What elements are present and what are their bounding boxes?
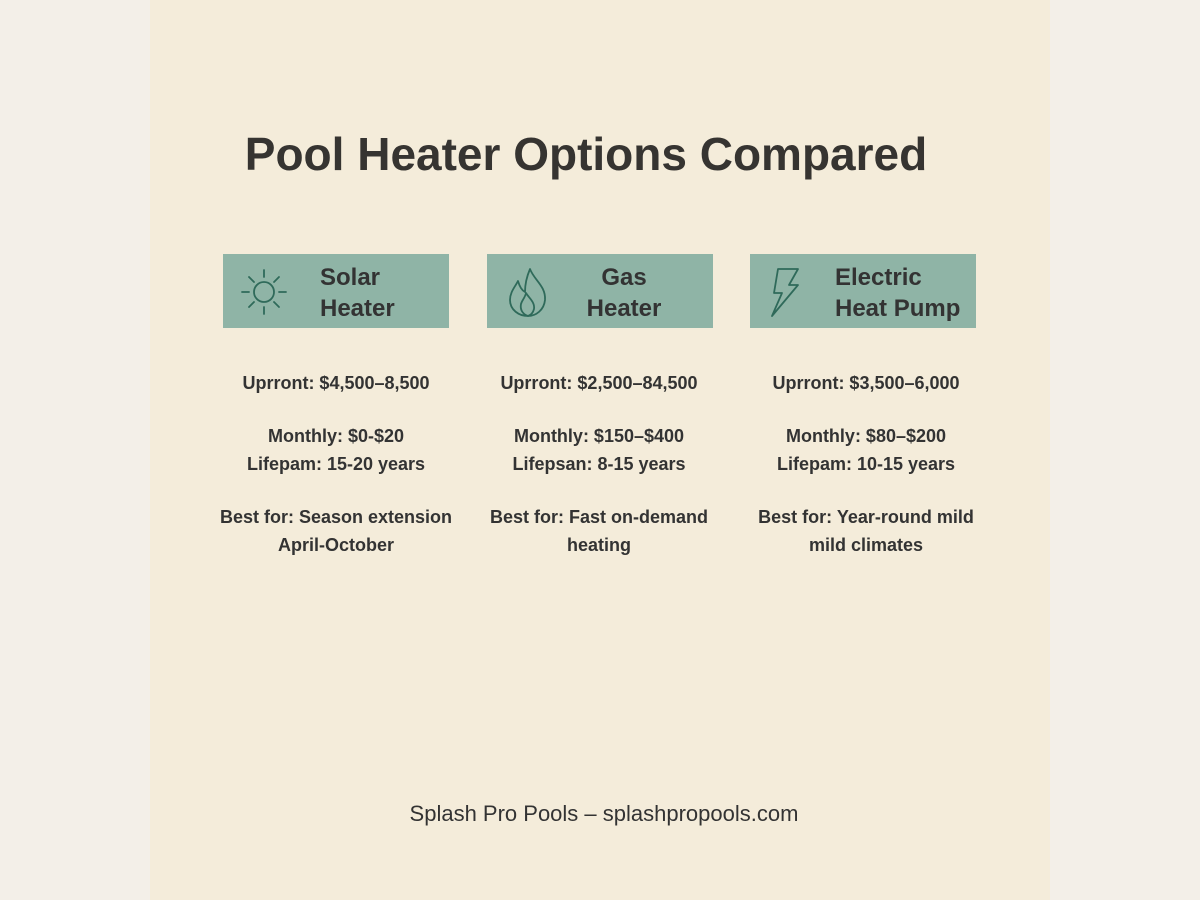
icon: flame bbox=[509, 268, 546, 317]
column: electric details: Lifepam: 10-15 years bbox=[777, 454, 955, 474]
column: solar details: Monthly: $0-$20 bbox=[268, 426, 404, 446]
header: gas heater: Gas bbox=[601, 264, 647, 291]
column: electric details: Monthly: $80–$200 bbox=[786, 426, 946, 446]
column: solar details: Lifepam: 15-20 years bbox=[247, 454, 425, 474]
column: gas details: Monthly: $150–$400 bbox=[514, 426, 684, 446]
column: gas details: Lifepsan: 8-15 years bbox=[512, 454, 686, 474]
column: solar details: April-October bbox=[278, 535, 394, 555]
header: solar heater bbox=[223, 254, 449, 328]
header: electric heat pump: Heat Pump bbox=[835, 295, 960, 322]
header: electric heat pump bbox=[750, 254, 976, 328]
background panel bbox=[150, 0, 1050, 900]
column: electric details bbox=[758, 373, 974, 555]
icon: sun bbox=[241, 269, 287, 315]
icon: lightning bbox=[771, 268, 799, 317]
title: Pool Heater Options Compared bbox=[245, 128, 927, 180]
column: gas details bbox=[490, 373, 708, 555]
column: gas details: Best for: Fast on-demand bbox=[490, 507, 708, 527]
header: electric heat pump: Electric bbox=[835, 264, 922, 291]
column: electric details: Best for: Year-round mild bbox=[758, 507, 974, 527]
column: solar details: Best for: Season extension bbox=[220, 507, 452, 527]
header: gas heater bbox=[487, 254, 713, 328]
column: gas details: Uprront: $2,500–84,500 bbox=[500, 373, 698, 393]
header: solar heater: Heater bbox=[320, 295, 395, 322]
column: electric details: Uprront: $3,500–6,000 bbox=[772, 373, 960, 393]
column: gas details: heating bbox=[567, 535, 631, 555]
header: gas heater: Heater bbox=[587, 295, 661, 322]
column: electric details: mild climates bbox=[809, 535, 923, 555]
header: solar heater: Solar bbox=[320, 264, 380, 291]
column: solar details bbox=[220, 373, 452, 555]
column: solar details: Uprront: $4,500–8,500 bbox=[242, 373, 430, 393]
footer: Splash Pro Pools – splashpropools.com bbox=[410, 801, 798, 826]
